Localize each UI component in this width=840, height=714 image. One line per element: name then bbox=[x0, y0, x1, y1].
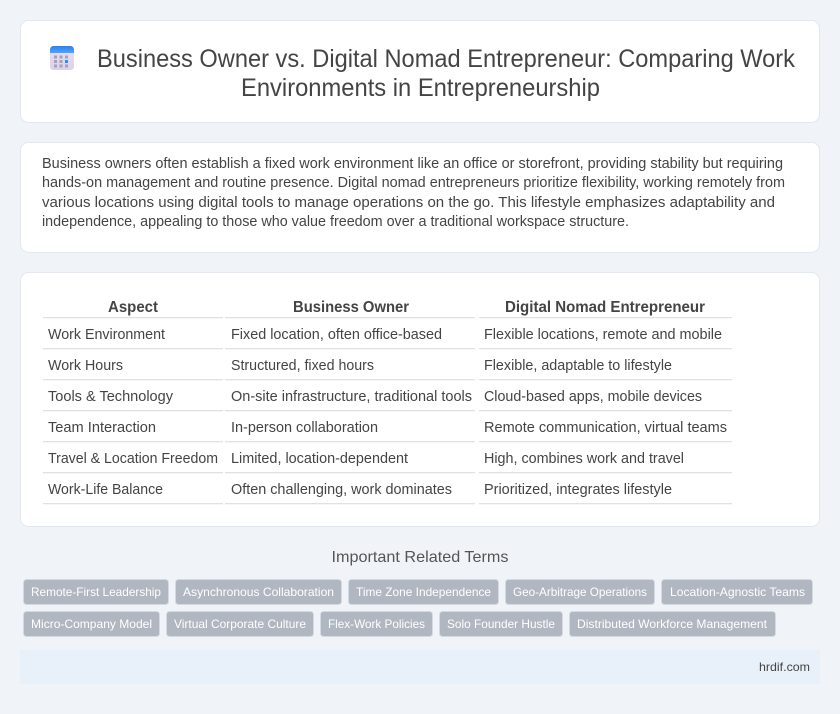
table rows: Fixed location, often office-based bbox=[231, 327, 442, 343]
table rows: High, combines work and travel bbox=[484, 451, 684, 467]
table rows: On-site infrastructure, traditional tools bbox=[231, 389, 472, 405]
table header: Aspect bbox=[108, 299, 159, 316]
footer bbox=[20, 650, 820, 684]
icon: calendar bbox=[50, 46, 74, 70]
related term tags: Asynchronous Collaboration bbox=[183, 585, 334, 599]
related term tags bbox=[24, 580, 812, 636]
table header: Digital Nomad Entrepreneur bbox=[505, 299, 705, 316]
table rows: Flexible, adaptable to lifestyle bbox=[484, 358, 672, 374]
table rows: Often challenging, work dominates bbox=[231, 482, 452, 498]
table rows: Work Environment bbox=[48, 327, 165, 343]
intro text: various locations using digital tools to manage operations on the go. This lifestyle emphasizes adaptability and bbox=[42, 195, 775, 211]
table header bbox=[108, 299, 705, 316]
related term tags: Geo-Arbitrage Operations bbox=[513, 585, 647, 599]
table rows: Remote communication, virtual teams bbox=[484, 420, 727, 436]
table rows: Team Interaction bbox=[48, 420, 156, 436]
intro text: Business owners often establish a fixed work environment like an office or storefront, providing stability but requiring bbox=[42, 156, 783, 172]
table rows: Flexible locations, remote and mobile bbox=[484, 327, 722, 343]
table rows: Structured, fixed hours bbox=[231, 358, 374, 374]
table rows: Tools & Technology bbox=[48, 389, 174, 405]
related term tags: Remote-First Leadership bbox=[31, 585, 161, 599]
table rows: Prioritized, integrates lifestyle bbox=[484, 482, 672, 498]
intro text bbox=[42, 156, 785, 230]
table header: Business Owner bbox=[293, 299, 409, 316]
related term tags: Distributed Workforce Management bbox=[577, 617, 768, 631]
footer site name: hrdif.com bbox=[759, 660, 810, 674]
related term tags: Micro-Company Model bbox=[31, 617, 152, 631]
related term tags: Location-Agnostic Teams bbox=[670, 585, 805, 599]
panel: comparison table bbox=[20, 272, 820, 526]
panel: introduction bbox=[20, 142, 820, 252]
title: Business Owner vs. Digital Nomad Entrepreneur: Comparing Work bbox=[97, 45, 795, 73]
intro text: independence, appealing to those who value freedom over a traditional workspace structure. bbox=[42, 214, 629, 230]
table rows bbox=[48, 327, 727, 498]
table rows: Travel & Location Freedom bbox=[48, 451, 218, 467]
title bbox=[97, 45, 795, 102]
heading: important related terms: Important Related Terms bbox=[332, 549, 508, 566]
table rows: Cloud-based apps, mobile devices bbox=[484, 389, 702, 405]
panel: title header bbox=[20, 20, 820, 122]
table rows: Work Hours bbox=[48, 358, 123, 374]
related term tags: Flex-Work Policies bbox=[328, 617, 425, 631]
related term tags: Solo Founder Hustle bbox=[447, 617, 555, 631]
table rows: In-person collaboration bbox=[231, 420, 378, 436]
intro text: hands-on management and routine presence. Digital nomad entrepreneurs prioritize flexibility, working remotely from bbox=[42, 175, 785, 191]
related term tags: Virtual Corporate Culture bbox=[174, 617, 306, 631]
table rows: Limited, location-dependent bbox=[231, 451, 408, 467]
title: Environments in Entrepreneurship bbox=[241, 74, 600, 102]
table rows: Work-Life Balance bbox=[48, 482, 163, 498]
related term tags: Time Zone Independence bbox=[356, 585, 491, 599]
